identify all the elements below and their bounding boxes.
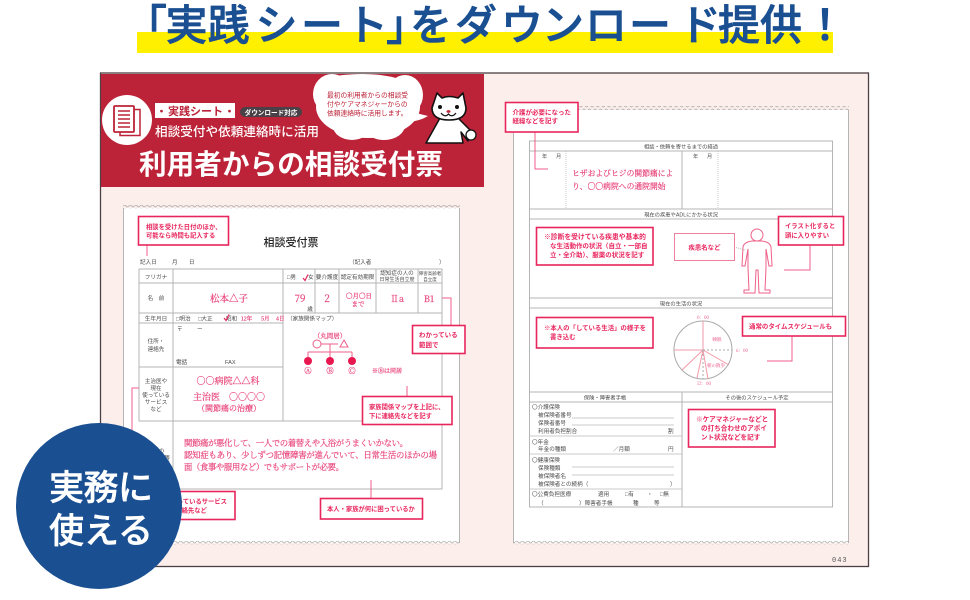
form table: progress and status: 保険・障害者手帳 — [584, 394, 627, 402]
form date row — [140, 258, 445, 266]
callout: services: の連絡先など — [169, 506, 207, 514]
callout: known range: 範囲で — [419, 340, 439, 349]
callout: background: 経緯などを記す — [512, 116, 558, 125]
family map — [304, 331, 402, 376]
callout: living: 書き込む — [550, 332, 576, 341]
panel: red header — [101, 74, 484, 187]
icon: document — [102, 95, 152, 145]
form table: 主治医や — [145, 377, 168, 385]
form table: progress and status: 現在の疾患やADLにかかる状況 — [644, 210, 719, 218]
label: download badge: ダウンロード対応 — [245, 108, 298, 117]
form table: 要介護度 — [316, 273, 339, 281]
speech bubble: 最初の利用者からの相談受 — [327, 90, 408, 100]
figure: body outline — [742, 229, 772, 293]
handwritten entries: 4日 — [276, 314, 285, 322]
form table: 名 前 — [148, 294, 165, 302]
label: download badge — [240, 107, 302, 117]
panel: left form sheet — [123, 205, 465, 545]
insurance section: ・ — [647, 492, 653, 498]
callout: care manager: ント状況などを記す — [701, 432, 761, 442]
form table: 〒 — [177, 326, 183, 333]
insurance section: 利用者負担割合 — [538, 427, 578, 435]
chart: daily schedule pie: 0：00 — [697, 315, 709, 321]
callout: services — [125, 388, 235, 520]
family map: （丸岡居） — [314, 331, 346, 340]
callout: services: 現在使っているサービス — [158, 496, 227, 506]
insurance section: 保険者番号 — [538, 419, 566, 427]
form table: フリガナ — [145, 273, 168, 281]
callout: illustrate: 頭に入りやすい — [785, 230, 829, 240]
insurance section: 〇公費負担医療 — [532, 490, 572, 498]
handwritten entries: 松本△子 — [210, 291, 248, 305]
form date row: ） — [439, 259, 445, 266]
insurance section: 適用 — [598, 490, 609, 498]
badge: practical use: 実務に — [49, 469, 153, 508]
form table: 困りごと等 — [142, 454, 170, 462]
handwritten history: り、〇〇病院への通院開始 — [572, 181, 667, 192]
handwritten entries: 面（食事や服用など）でもサポートが必要。 — [184, 461, 344, 473]
subheading: 相談受付や依頼連絡時に活用 — [155, 124, 319, 139]
form table: progress and status: 相談・依頼を寄せるまでの経過 — [644, 142, 719, 150]
insurance section: □無 — [660, 490, 669, 498]
icon: cat — [426, 93, 476, 143]
form title: 相談受付票 — [264, 235, 318, 249]
handwritten history: ヒザおよびヒジの関節痛によ — [572, 168, 673, 179]
form table: □明治 — [176, 314, 191, 322]
form table: 女 — [308, 273, 314, 281]
insurance section: 保険種類 — [538, 464, 561, 472]
insurance section: 被保険者との続柄（ — [538, 480, 589, 488]
label: practical sheet: ・実践シート・ — [156, 104, 235, 118]
insurance section: ） — [670, 481, 676, 488]
chart: daily schedule pie — [674, 315, 749, 387]
form date row: 月 — [172, 259, 178, 266]
callout: illustrate: イラスト化すると — [785, 221, 835, 230]
insurance section: （ — [538, 500, 544, 507]
form table: □大正 — [198, 314, 213, 322]
chart: daily schedule pie: 12：00 — [697, 381, 712, 387]
callout: date: 可能なら時間も記入する — [146, 230, 215, 240]
callout: date: 相談を受けた日付のほか、 — [146, 222, 221, 231]
badge: practical use: 使える — [49, 512, 153, 551]
family map: Ⓐ — [304, 366, 312, 376]
speech bubble: 付やケアマネジャーからの — [327, 100, 408, 108]
callout: care manager: ※ケアマネジャーなどと — [696, 414, 768, 424]
form table: 障害高齢者 — [419, 270, 442, 277]
insurance section: □有 — [625, 490, 634, 498]
form table: 日常生活自立度 — [379, 276, 415, 283]
handwritten entries: B1 — [424, 292, 434, 305]
speech bubble — [313, 74, 428, 140]
form table: progress and status: 年 — [693, 152, 698, 160]
callout: family map: 家族関係マップを上記に、 — [369, 402, 444, 411]
handwritten entries: 12年 — [241, 314, 253, 322]
insurance section: 被保険者名 — [538, 472, 566, 480]
callout: family map: 下に連絡先などを記す — [369, 411, 432, 420]
insurance section: 種 — [633, 499, 639, 507]
heading: 利用者からの相談受付票 — [139, 149, 443, 180]
form table: 認定有効期限 — [341, 273, 375, 281]
handwritten entries: 2 — [324, 290, 330, 305]
insurance section: 被保険者番号 — [538, 411, 572, 419]
family map: Ⓑ — [326, 366, 334, 376]
form table — [139, 269, 442, 489]
badge: practical use — [16, 423, 182, 589]
form table: （家族関係マップ） — [287, 314, 337, 322]
insurance section: 〇年金 — [532, 438, 549, 446]
insurance section: 年金の種類 — [538, 445, 566, 453]
form table: 電話 — [176, 359, 188, 366]
form table: 本人の — [148, 447, 165, 455]
chart: daily schedule pie: 6：00 — [736, 348, 749, 354]
insurance section: 円 — [668, 446, 674, 453]
callout: troubles — [320, 480, 422, 519]
form table: progress and status: 月 — [707, 153, 712, 160]
family map: Ⓒ — [348, 366, 356, 376]
panel: book spread — [16, 73, 868, 589]
callout: family map — [362, 386, 452, 424]
form table: 使っている — [142, 391, 170, 399]
handwritten entries — [184, 274, 438, 473]
form table: 認知症の人の — [380, 269, 414, 277]
family map: ※Ⓑは同居 — [372, 366, 402, 375]
callout: troubles: 本人・家族が何に困っているか — [327, 504, 416, 513]
insurance section: 割 — [668, 427, 674, 435]
form table: 現在 — [150, 384, 162, 392]
form table: □男 — [287, 274, 296, 281]
form table: 自立度 — [423, 276, 437, 283]
handwritten entries: 認知症もあり、少しずつ記憶障害が進んでいて、日常生活のほかの場 — [184, 449, 438, 461]
callout: known range: わかっている — [419, 331, 458, 339]
form table: progress and status: その後のスケジュール予定 — [725, 394, 789, 402]
form date row: 記入日 — [140, 259, 157, 266]
callout: diagnosis: ※診断を受けている疾患や基本的 — [544, 232, 646, 241]
handwritten entries: 79 — [294, 290, 306, 305]
title: 「実践シート」をダウンロード提供！ — [125, 2, 846, 49]
form table: ー — [197, 327, 203, 333]
callout: living — [536, 318, 653, 348]
handwritten entries: 〇月〇日 — [346, 291, 372, 300]
form table: 昭和 — [226, 314, 238, 322]
form table: progress and status: 現在の生活の状況 — [660, 300, 703, 308]
callout: schedule: 通常のタイムスケジュールも — [749, 322, 832, 330]
form table: 生年月日 — [145, 314, 167, 322]
handwritten entries: （関節痛の治療） — [197, 403, 261, 414]
form date row: 日 — [189, 259, 195, 266]
callout: diagnosis — [536, 228, 653, 265]
callout: living: ※本人の「している生活」の様子を — [544, 323, 646, 332]
form table: 住所・ — [148, 337, 164, 345]
handwritten entries: まで — [352, 299, 365, 308]
page number: 043 — [832, 557, 848, 565]
insurance section: ）障害者手帳 — [579, 499, 613, 507]
insurance section — [530, 403, 682, 507]
insurance section: 等 — [654, 499, 660, 507]
form table: など — [150, 405, 162, 413]
speech bubble: 依頼連絡時に活用します。 — [327, 108, 407, 118]
form date row: （記入者 — [349, 258, 372, 266]
form table: progress and status: 年 — [542, 152, 547, 160]
callout: known range — [412, 298, 465, 354]
callout: background — [506, 102, 578, 169]
form table: サービス — [145, 398, 168, 406]
chart: daily schedule pie: 朝の散歩 — [707, 362, 725, 369]
title highlight band — [137, 32, 833, 53]
callout: care manager: の打ち合わせのアポイ — [701, 424, 767, 432]
callout: disease name: 疾患名など — [689, 242, 721, 252]
callout: care manager — [688, 410, 775, 447]
handwritten entries: 歳 — [307, 305, 313, 313]
form table: progress and status: 月 — [556, 153, 561, 160]
handwritten entries: Ⅱa — [390, 292, 404, 305]
callout: diagnosis: な生活動作の状況（自立・一部自 — [550, 241, 648, 250]
callout: diagnosis: 立・全介助）、服薬の状況を記す — [550, 250, 645, 259]
handwritten entries: 関節痛が悪化して、一人での着替えや入浴がうまくいかない。 — [184, 437, 408, 449]
insurance section: 〇健康保険 — [532, 456, 560, 464]
insurance section: ／月額 — [613, 445, 630, 453]
handwritten entries: 主治医 〇〇〇〇 — [193, 390, 265, 403]
form table: progress and status — [530, 141, 832, 507]
callout: date — [138, 216, 228, 256]
handwritten entries: 5月 — [261, 314, 270, 322]
chart: daily schedule pie: 睡眠 — [712, 336, 722, 343]
panel: right form sheet — [506, 102, 849, 545]
insurance section: 〇介護保険 — [532, 403, 560, 411]
callout: schedule — [742, 316, 846, 361]
form table: FAX — [225, 360, 236, 366]
handwritten history — [572, 168, 673, 192]
callout: illustrate — [778, 216, 844, 270]
callout: background: 介護が必要になった — [512, 108, 571, 116]
form table: 連絡先 — [148, 345, 165, 353]
callout: disease name — [674, 234, 745, 260]
handwritten entries: 〇〇病院△△科 — [196, 374, 260, 387]
